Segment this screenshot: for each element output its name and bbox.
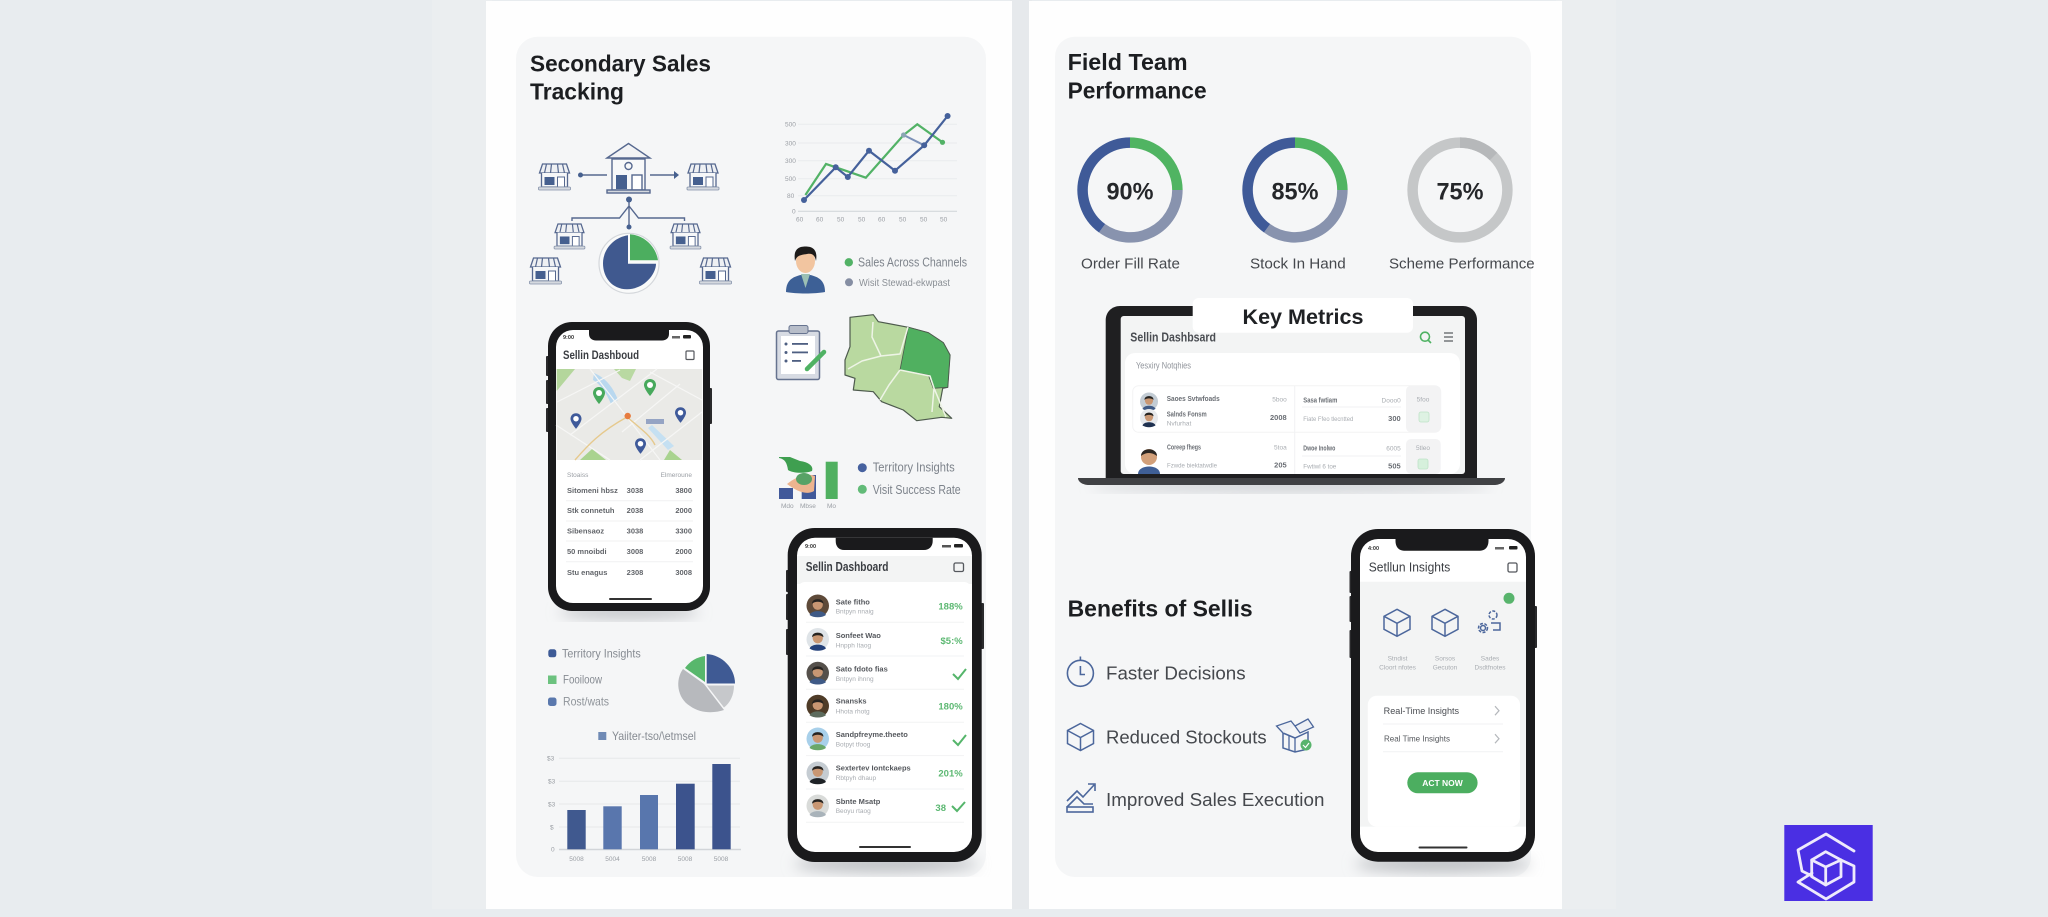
legend: territory follow-up: Territory Insights — [562, 646, 641, 660]
heading: sellin dashboard: Sellin Dashbsard — [1130, 331, 1216, 345]
badge: notification — [1504, 593, 1514, 604]
phone: sellin insights: 4:00 — [1368, 546, 1379, 552]
chart: sales line chart: 60 — [796, 216, 804, 224]
legend: bar chart key: Yaiiter-tso/\etmsel — [612, 729, 696, 743]
labels: icon captions — [1379, 656, 1506, 672]
card: metric rows: Yesxiry Notqhies — [1136, 361, 1191, 372]
chart: territory bar chart: 5008 — [642, 856, 657, 863]
icon: head office building — [607, 144, 650, 193]
list: field team members — [798, 582, 971, 840]
labels: icon captions: Cloort nfotes — [1379, 664, 1417, 672]
chart: sales line chart: 50 — [899, 216, 907, 224]
chart: mini territory bars — [779, 457, 838, 510]
card: insights links: Real-Time Insights — [1384, 706, 1460, 716]
gauge: order fill rate 90%: 90% — [1106, 178, 1154, 206]
table: store figures: Sitomeni hbsz — [567, 486, 618, 495]
icon: menu — [686, 351, 694, 360]
panel: secondary sales tracking — [486, 1, 1012, 909]
table: store figures: 3008 — [675, 568, 692, 577]
chart: sales line chart: 50 — [858, 216, 866, 224]
laptop: key metrics dashboard — [1078, 306, 1505, 491]
chart: territory pie — [678, 654, 735, 712]
icon: clipboard checklist — [776, 326, 824, 380]
phone: sellin dashboard with map — [546, 322, 712, 618]
table: store figures: 2000 — [675, 506, 692, 515]
chart: sales line chart: 500 — [785, 122, 796, 128]
card: metric rows: Sasa fwtiam — [1303, 396, 1338, 404]
title: field team performance: Performance — [1068, 78, 1207, 104]
list: field team members: $5:% — [941, 636, 963, 647]
table: store figures: 3800 — [675, 486, 692, 495]
chart: sales line chart: 50 — [837, 216, 845, 224]
list: field team members: Snansks — [836, 696, 867, 706]
gauge: stock in hand 85% — [1248, 143, 1346, 272]
chart: mini territory bars: Mo — [827, 503, 836, 510]
map: store locations — [556, 369, 702, 460]
list: field team members: Sandpfreyme.theeto — [836, 730, 908, 739]
benefit: faster decisions — [1067, 656, 1246, 686]
chart: sales line chart: 80 — [787, 193, 795, 200]
icon: stopwatch — [1067, 656, 1093, 686]
legend: territory and visit: Visit Success Rate — [873, 483, 961, 497]
icon: sales person — [786, 246, 825, 294]
logo — [1784, 825, 1873, 901]
chart: territory bar chart: 5004 — [605, 856, 620, 863]
gauge: order fill rate 90% — [1081, 143, 1180, 272]
card: insights links: Real Time Insights — [1384, 734, 1450, 744]
chart: sales line chart: 50 — [940, 216, 948, 224]
panel: field team performance — [1029, 1, 1562, 909]
gauge: stock in hand 85%: Stock In Hand — [1250, 255, 1346, 272]
labels: icon captions: Dsdtfnotes — [1474, 664, 1506, 672]
icon: menu — [954, 563, 964, 572]
chart: territory bar chart — [547, 756, 741, 863]
phone: sellin insights — [1350, 529, 1537, 872]
table: store figures: Stoaiss — [567, 472, 589, 479]
gauge: scheme performance 75% — [1389, 143, 1535, 272]
heading: sellin dashboard: Sellin Dashboard — [806, 560, 888, 574]
chart: territory bar chart: $3 — [547, 756, 555, 762]
table: store figures: Elmeroune — [661, 472, 692, 479]
card: metric rows: 5foo — [1417, 396, 1430, 404]
icon: trending chart — [1067, 784, 1095, 812]
list: field team members: Hnpph Itaog — [836, 642, 872, 650]
icon: open box with check — [1276, 719, 1314, 752]
phone: sellin dashboard list: 9:00 — [805, 544, 816, 550]
button: act now: ACT NOW — [1422, 778, 1464, 788]
list: field team members: Beoyu rtaog — [836, 808, 871, 815]
list: field team members: Sextertev Iontckaeps — [836, 764, 911, 772]
list: field team members: Sonfeet Wao — [836, 631, 881, 640]
table: store figures: 3300 — [675, 526, 692, 536]
legend: territory follow-up: Fooiloow — [563, 673, 602, 687]
chart: sales line chart: 60 — [878, 216, 886, 224]
chart: sales line chart — [785, 113, 957, 224]
chart: sales line chart: 60 — [816, 216, 824, 224]
title: field team performance — [1068, 49, 1207, 104]
table: store figures: Sibensaoz — [567, 526, 604, 536]
table: store figures: 2308 — [627, 568, 643, 577]
phone: sellin dashboard with map: 9:00 — [563, 335, 574, 341]
list: field team members: Hhota rhotg — [836, 708, 870, 716]
title: secondary sales tracking: Secondary Sales — [530, 51, 711, 77]
map: territory regions — [845, 315, 952, 421]
gauge: order fill rate 90%: Order Fill Rate — [1081, 255, 1180, 272]
icon: box — [1068, 724, 1094, 750]
gauge: scheme performance 75%: 75% — [1436, 178, 1484, 206]
table: store figures: Stu enagus — [567, 568, 607, 577]
icon: filter menu — [1444, 333, 1453, 341]
icon: box one — [1384, 609, 1410, 636]
card: metric rows: Nvfurhat — [1167, 420, 1191, 428]
benefit: improved sales execution: Improved Sales Execution — [1106, 790, 1324, 810]
card: metric rows: 505 — [1388, 462, 1401, 470]
list: field team members: 201% — [938, 768, 963, 780]
icon: box two — [1432, 609, 1458, 636]
icon: menu — [1508, 563, 1517, 572]
chart: territory bar chart: 5008 — [569, 856, 584, 863]
badge: key metrics — [1193, 298, 1413, 333]
legend: territory and visit: Territory Insights — [873, 461, 955, 475]
card: metric rows — [1125, 353, 1460, 474]
table: store figures: Stk connetuh — [567, 506, 615, 515]
card: metric rows: Fwtiwl 6 toe — [1303, 464, 1337, 470]
list: field team members: 188% — [938, 602, 963, 612]
chart: mini territory bars: Mdo — [781, 503, 794, 510]
chart: sales line chart: 500 — [785, 176, 796, 183]
phone: sellin dashboard list — [786, 528, 984, 872]
card: metric rows: 2008 — [1270, 413, 1287, 422]
heading: benefits of sellis: Benefits of Sellis — [1068, 596, 1253, 622]
table: store figures — [562, 461, 697, 580]
chart: territory bar chart: 5008 — [714, 856, 729, 863]
benefit: reduced stockouts: Reduced Stockouts — [1106, 727, 1267, 747]
chart: territory bar chart: $ — [550, 824, 554, 832]
legend: sales channels — [845, 256, 967, 289]
list: field team members: Botpyt tfoog — [836, 742, 871, 748]
legend: territory follow-up — [548, 646, 641, 709]
chart: network pie — [599, 233, 659, 293]
title: field team performance: Field Team — [1068, 49, 1188, 75]
card: metric rows: 5boo — [1272, 396, 1287, 404]
chart: territory bar chart: 5008 — [678, 856, 693, 863]
icon: search — [1420, 332, 1431, 343]
benefit: reduced stockouts — [1068, 719, 1314, 752]
list: field team members: Bntpyn ihnng — [836, 676, 874, 683]
card: metric rows: 6005 — [1386, 446, 1401, 452]
list: field team members: Sbnte Msatp — [836, 797, 881, 806]
heading: sellin insights: Setllun Insights — [1369, 561, 1450, 575]
list: field team members: Rbtpyh dhaup — [836, 775, 877, 782]
diagram: store distribution network — [530, 144, 732, 293]
chart: mini territory bars: Mbse — [800, 503, 816, 510]
legend: sales channels: Sales Across Channels — [858, 256, 967, 270]
list: field team members: Sato fdoto fias — [836, 664, 888, 674]
card: metric rows: 205 — [1274, 460, 1287, 470]
table: store figures: 3008 — [627, 547, 643, 556]
card: metric rows: Dwoe Inolwo — [1303, 444, 1336, 452]
icon: gears — [1478, 611, 1500, 632]
list: field team members: 180% — [938, 702, 963, 712]
chart: sales line chart: 50 — [920, 216, 928, 224]
chart: territory bar chart: $3 — [548, 802, 556, 808]
table: store figures: 2038 — [627, 506, 643, 515]
card: metric rows: Dooo0 — [1382, 398, 1401, 404]
card: metric rows: Fzwde biektatwdle — [1167, 462, 1217, 470]
chart: sales line chart: 300 — [785, 158, 796, 165]
labels: icon captions: Sades — [1481, 656, 1500, 662]
card: metric rows: Saoes Svtwfoads — [1167, 394, 1220, 403]
benefit: improved sales execution — [1067, 784, 1324, 812]
list: field team members: 38 — [935, 803, 946, 814]
legend: sales channels: Wisit Stewad-ekwpast — [859, 278, 950, 289]
title: secondary sales tracking — [530, 51, 711, 104]
legend: territory follow-up: Rost/wats — [563, 695, 609, 709]
table: store figures: 50 mnoibdi — [567, 547, 607, 556]
list: field team members: Sate fitho — [836, 598, 870, 606]
heading: sellin dashboard: Sellin Dashboud — [563, 348, 639, 362]
card: metric rows: Coreep fhegs — [1167, 442, 1201, 452]
card: metric rows: Salnds Fonsm — [1167, 410, 1207, 418]
table: store figures: 3038 — [627, 486, 643, 495]
card: metric rows: 5toa — [1274, 444, 1287, 452]
labels: icon captions: Stndist — [1388, 656, 1408, 662]
list: field team members: Bntpyn nnaig — [836, 608, 874, 616]
button: act now — [1407, 772, 1478, 793]
gauge: scheme performance 75%: Scheme Performance — [1389, 255, 1535, 272]
table: store figures: 2000 — [675, 547, 692, 556]
benefit: faster decisions: Faster Decisions — [1106, 663, 1246, 683]
chart: territory bar chart: 0 — [551, 846, 555, 854]
labels: icon captions: Gecuton — [1433, 664, 1458, 672]
card: metric rows: 300 — [1388, 414, 1401, 423]
card: insights links — [1368, 696, 1520, 827]
labels: icon captions: Sorsos — [1435, 656, 1456, 662]
chart: sales line chart: 0 — [792, 208, 796, 216]
chart: territory bar chart: $3 — [548, 778, 556, 786]
gauge: stock in hand 85%: 85% — [1272, 178, 1318, 206]
legend: territory and visit — [858, 461, 961, 497]
chart: sales line chart: 300 — [785, 140, 796, 148]
badge: key metrics: Key Metrics — [1242, 306, 1364, 329]
table: store figures: 3038 — [627, 526, 643, 536]
card: metric rows: Fiate Ffeo tlecntted — [1303, 416, 1354, 423]
title: secondary sales tracking: Tracking — [530, 78, 624, 104]
card: metric rows: 5tleo — [1416, 445, 1430, 452]
